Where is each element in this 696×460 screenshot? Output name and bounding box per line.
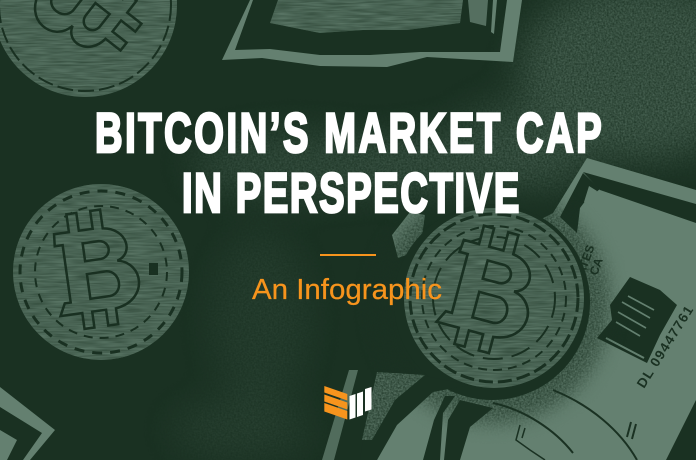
logo bbox=[324, 386, 372, 420]
title: BITCOIN’S MARKET CAP bbox=[95, 103, 602, 165]
banknote, right bbox=[377, 158, 696, 460]
banknote serial number: DL 09447761 bbox=[634, 302, 696, 391]
coin, right bbox=[404, 208, 584, 388]
light streak behind logo bbox=[322, 370, 358, 460]
coin, left bbox=[13, 184, 189, 360]
banknote corner numeral bbox=[560, 173, 600, 233]
lower coin outline bbox=[493, 390, 637, 460]
divider bbox=[320, 254, 376, 256]
subtitle: An Infographic bbox=[252, 274, 442, 306]
title: IN PERSPECTIVE bbox=[182, 163, 519, 225]
lower dark folds bbox=[360, 375, 493, 460]
banknote, right: CA bbox=[587, 256, 606, 277]
icon: bitcoin symbol bbox=[47, 206, 145, 332]
banknote, top bbox=[222, 0, 522, 67]
coin shadow bbox=[374, 187, 610, 423]
background grain shading bbox=[170, 0, 696, 460]
banknote lettering: ATES bbox=[574, 243, 597, 277]
banknote dark inner border bbox=[583, 172, 696, 223]
title bbox=[95, 103, 602, 225]
banknote corner, lower left bbox=[0, 387, 55, 460]
icon: bitcoin symbol bbox=[432, 220, 547, 360]
coin, top left bbox=[0, 0, 177, 97]
banknote, left of coin bbox=[392, 212, 425, 258]
banknote portrait seal bbox=[597, 277, 677, 363]
icon: bitcoin symbol bbox=[11, 0, 154, 73]
banknote tick marks bbox=[627, 422, 636, 439]
dark streaks over coins bbox=[0, 0, 584, 388]
